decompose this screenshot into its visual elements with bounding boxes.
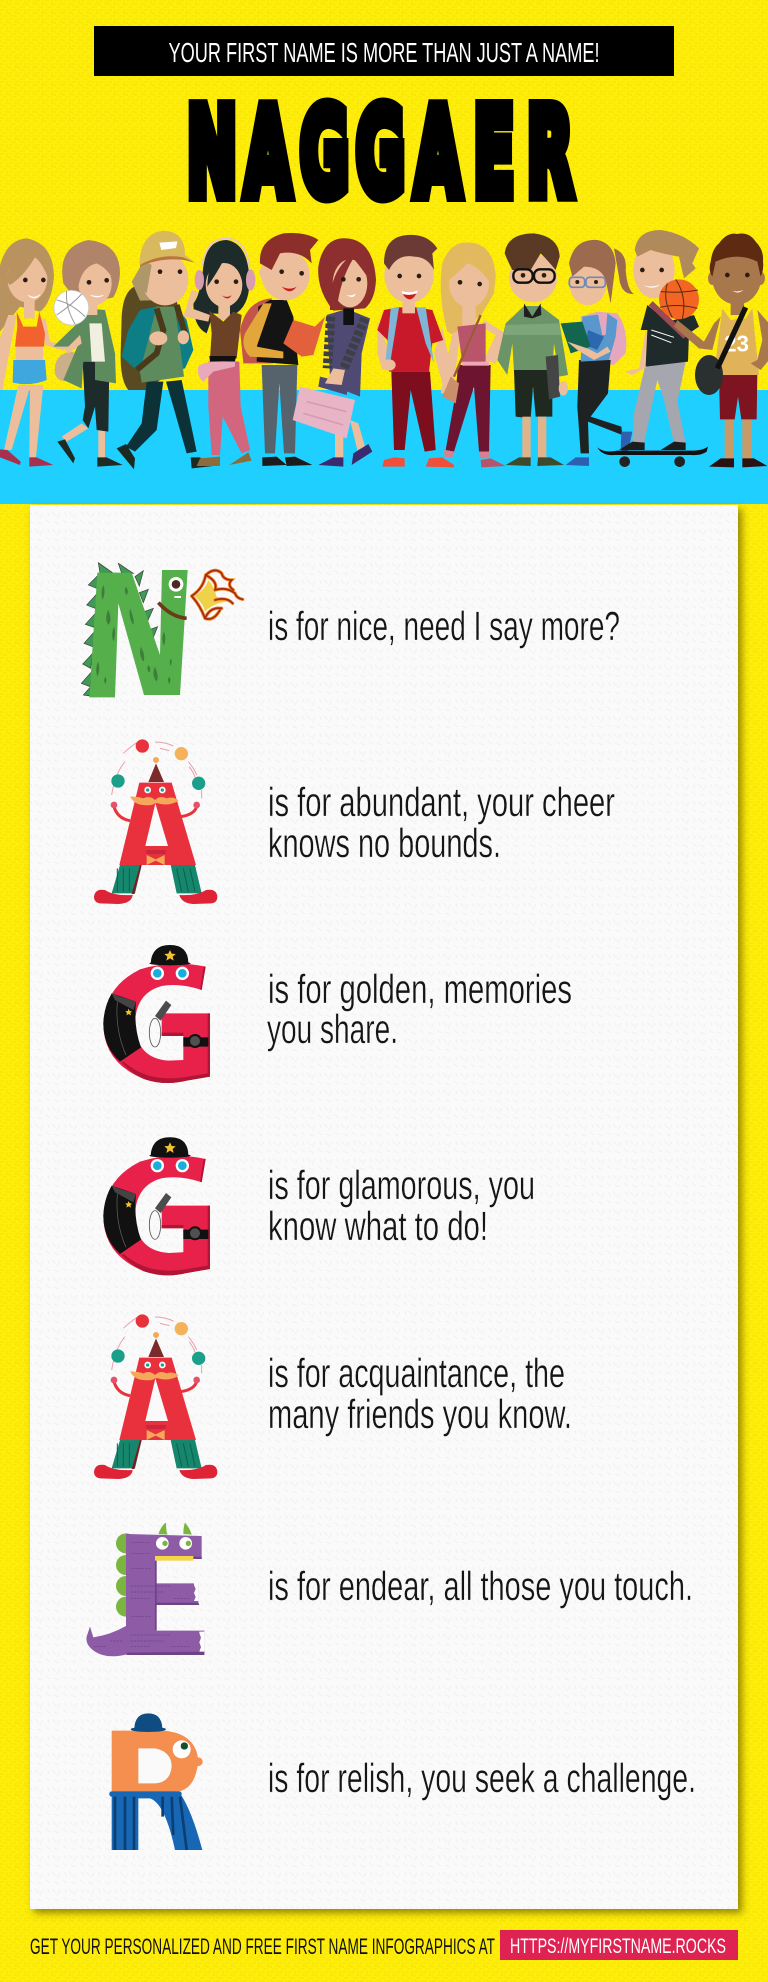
text: G lines: is for golden, memories <box>268 966 572 1012</box>
icon: juggling clown A again <box>94 1314 217 1479</box>
row: letter R <box>109 1713 696 1850</box>
person: boy with curly hair in jersey <box>695 234 768 467</box>
text: G lines <box>267 966 572 1052</box>
text: N line: is for nice, need I say more? <box>268 603 620 649</box>
icon: police G again <box>103 1137 210 1275</box>
text: A lines <box>268 779 615 866</box>
icon: flame breath <box>192 570 243 619</box>
footer link badge <box>500 1930 738 1960</box>
person: boy with book <box>240 233 325 466</box>
row: letter A second <box>94 1314 572 1479</box>
row: letter E <box>86 1523 693 1656</box>
person: girl with black hair and headphones <box>183 238 255 466</box>
text: second A lines <box>268 1350 572 1437</box>
person: boy with curly hair in jersey: 23 <box>724 331 749 357</box>
illustration: sky-blue floor band <box>0 390 768 504</box>
text: A lines: knows no bounds. <box>268 820 501 866</box>
text: second A lines: is for acquaintance, the <box>268 1350 565 1396</box>
icon: green dragon N <box>81 563 243 697</box>
row: letter A <box>94 739 615 904</box>
person: girl in green jacket with volleyball <box>53 240 123 467</box>
panel: white letters panel <box>30 505 738 1909</box>
banner: tagline <box>94 26 674 76</box>
icon: purple monster E <box>86 1523 204 1656</box>
person: skater boy with basketball <box>597 230 721 467</box>
person: blond girl <box>441 242 506 467</box>
row: letter G second <box>103 1137 535 1275</box>
text: second G lines: is for glamorous, you <box>268 1162 535 1208</box>
text: second G lines <box>268 1162 535 1249</box>
text: G lines: you share. <box>267 1006 398 1052</box>
row: letter N <box>81 563 620 697</box>
person: girl with red bob and pink bag <box>293 238 376 467</box>
footer call to action: GET YOUR PERSONALIZED AND FREE FIRST NAME INFOGRAPHICS AT <box>30 1934 495 1959</box>
footer <box>30 1930 738 1960</box>
person: girl with ponytail and tablet <box>561 240 634 466</box>
text: A lines: is for abundant, your cheer <box>268 779 615 825</box>
illustration: group of students <box>0 230 768 469</box>
person: girl in orange top <box>0 238 82 467</box>
icon: orange and blue R <box>109 1713 203 1850</box>
person: boy with glasses and laptop <box>497 233 568 466</box>
icon: juggling clown A <box>94 739 217 904</box>
text: second A lines: many friends you know. <box>268 1391 572 1437</box>
person: boy with cap and backpack <box>117 231 213 469</box>
text: second G lines: know what to do! <box>268 1203 488 1249</box>
title: name: NAGGAER <box>187 84 573 224</box>
row: letter G first <box>103 945 572 1083</box>
person: boy in red shirt <box>377 235 454 467</box>
icon: police G <box>103 945 210 1083</box>
